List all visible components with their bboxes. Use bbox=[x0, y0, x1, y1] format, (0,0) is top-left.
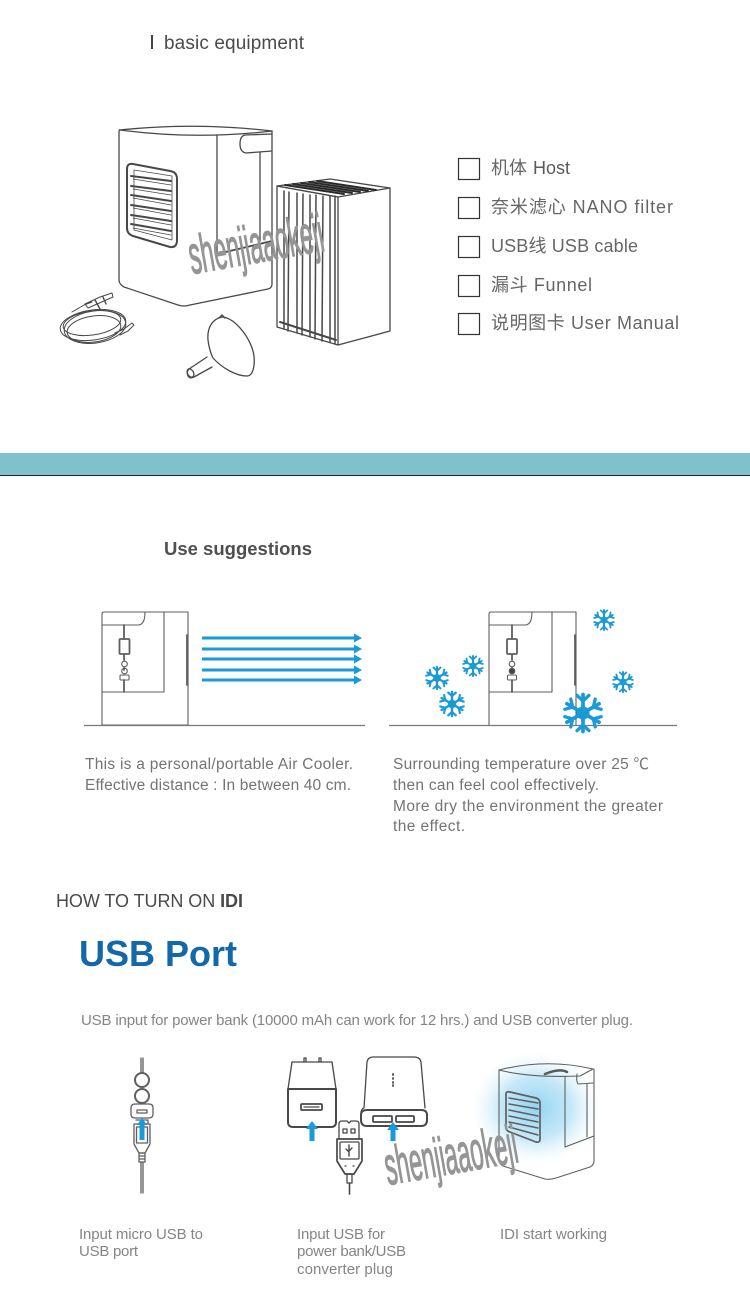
caption: power bank: Input USB for bbox=[297, 1226, 385, 1243]
caption: micro USB bbox=[79, 1226, 203, 1260]
text: personal cooler description: This is a personal/portable Air Cooler. bbox=[85, 756, 353, 773]
illustration: USB plug bbox=[337, 1121, 362, 1194]
blue insert arrow bbox=[306, 1121, 318, 1141]
illustration: wall charger bbox=[288, 1058, 336, 1141]
device side view bbox=[489, 612, 576, 725]
heading: how to turn on IDI: HOW TO TURN ON IDI bbox=[56, 891, 243, 911]
illustration: host unit bbox=[119, 126, 272, 306]
illustration: USB cable coil bbox=[58, 293, 134, 347]
device side view bbox=[102, 612, 188, 725]
item: funnel: 漏斗 Funnel bbox=[491, 275, 592, 295]
illustration: IDI cooler glowing bbox=[472, 1052, 600, 1179]
item: usb cable: USB线 USB cable bbox=[491, 236, 638, 256]
caption: power bank bbox=[297, 1226, 406, 1278]
blue glow bbox=[472, 1052, 600, 1164]
ground line bbox=[84, 724, 365, 726]
text: shenjiaaokeji bbox=[380, 1114, 522, 1197]
text: temperature description: Surrounding temperature over 25 ℃ bbox=[393, 756, 649, 773]
air flow arrows bbox=[202, 634, 362, 684]
icon: snowflakes bbox=[426, 610, 633, 732]
caption: micro USB: USB port bbox=[79, 1243, 139, 1260]
illustration: micro USB to port bbox=[131, 1058, 153, 1193]
item: host: Host bbox=[533, 158, 570, 178]
ground line bbox=[389, 724, 677, 726]
diagram: surrounding temperature bbox=[389, 610, 677, 732]
caption: power bank: converter plug bbox=[297, 1261, 393, 1278]
text: personal cooler description bbox=[85, 756, 353, 794]
text: personal cooler description: Effective distance : In between 40 cm. bbox=[85, 777, 351, 794]
teal divider band bbox=[0, 453, 750, 476]
caption: IDI start working: IDI start working bbox=[500, 1226, 607, 1243]
heading: use suggestions: Use suggestions bbox=[164, 538, 312, 559]
item: nano filter: 奈米滤心 NANO filter bbox=[491, 197, 673, 217]
item: host bbox=[458, 158, 570, 180]
blue insert arrow bbox=[137, 1118, 147, 1140]
blue insert arrow bbox=[387, 1122, 399, 1141]
caption: micro USB: Input micro USB to bbox=[79, 1226, 203, 1243]
checklist bbox=[458, 158, 679, 334]
text: shenjiaaokeji bbox=[184, 203, 328, 286]
text: temperature description bbox=[393, 756, 663, 835]
item: user manual: 说明图卡 User Manual bbox=[491, 313, 679, 333]
text: temperature description: the effect. bbox=[393, 818, 465, 835]
text: usb input description: USB input for power bank (10000 mAh can work for 12 hrs.) and USB converter plug. bbox=[81, 1012, 633, 1029]
illustration: power bank bbox=[361, 1057, 427, 1141]
title: USB Port: USB Port bbox=[79, 933, 237, 974]
text: temperature description: More dry the environment the greater bbox=[393, 798, 663, 815]
caption: power bank: power bank/USB bbox=[297, 1243, 406, 1260]
illustration: nano filter bbox=[277, 179, 390, 345]
text: temperature description: then can feel cool effectively. bbox=[393, 777, 599, 794]
item: host: 机体 bbox=[491, 158, 527, 178]
diagram: airflow distance bbox=[84, 612, 365, 726]
heading: basic equipment: basic equipment bbox=[164, 33, 305, 54]
illustration: funnel bbox=[186, 315, 254, 378]
